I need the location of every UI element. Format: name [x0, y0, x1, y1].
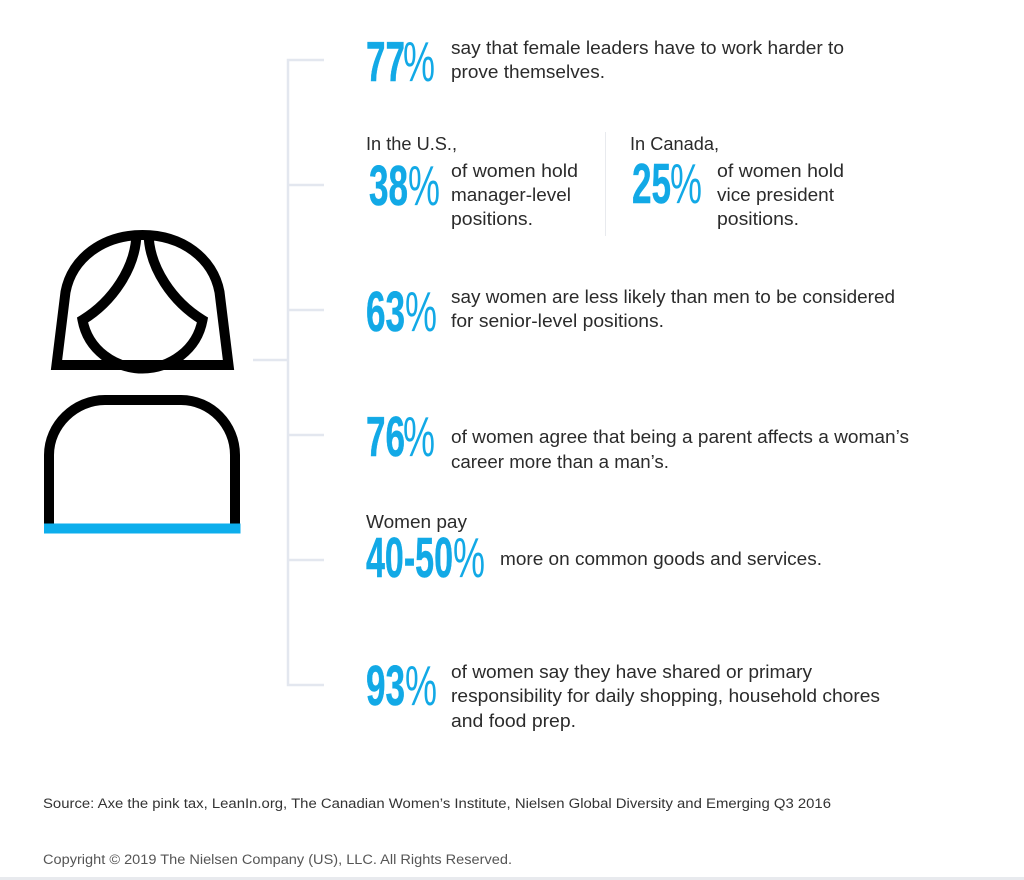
stat: 76% [366, 405, 909, 472]
stat: 93% [366, 654, 880, 731]
stat: 76%: 76 [366, 405, 405, 469]
stat: 93%: 93 [366, 654, 405, 718]
stat: U.S. 38%: positions. [451, 208, 533, 229]
stat: U.S. 38% [366, 133, 578, 229]
stat: Canada 25%: 25 [632, 152, 671, 216]
copyright: Copyright © 2019 The Nielsen Company (US), LLC. All Rights Reserved. [43, 852, 512, 867]
stat: Canada 25%: % [670, 152, 702, 216]
stat: 93%: of women say they have shared or primary [451, 661, 813, 682]
stat: 77% [366, 30, 844, 94]
stat: U.S. 38%: % [408, 154, 440, 218]
stat: 93%: responsibility for daily shopping, household chores [451, 685, 880, 706]
source note: Source: Axe the pink tax, LeanIn.org, The Canadian Women’s Institute, Nielsen Global Diversity and Emerging Q3 2016 [43, 796, 831, 811]
stat: 76%: % [403, 405, 435, 469]
stat: 77%: prove themselves. [451, 61, 605, 82]
stat: 76%: career more than a man’s. [451, 451, 669, 472]
stat: Canada 25%: vice president [717, 184, 834, 205]
stat: 77%: 77 [366, 30, 405, 94]
icon: hair outline [56, 235, 228, 365]
stat: U.S. 38%: of women hold [451, 160, 578, 181]
stat: Canada 25%: of women hold [717, 160, 844, 181]
stat: 63%: 63 [366, 280, 405, 344]
bottom strip [0, 877, 1024, 880]
stat: 40-50%: 40-50 [366, 526, 453, 590]
stat: 76%: of women agree that being a parent affects a woman’s [451, 426, 909, 447]
stat: 40-50%: % [453, 526, 485, 590]
stat: Canada 25% [630, 133, 844, 229]
stat: 63%: say women are less likely than men to be considered [451, 286, 895, 307]
stat: U.S. 38%: manager-level [451, 184, 571, 205]
icon: face and parting [82, 233, 202, 368]
icon: shoulders [49, 400, 235, 524]
stat: 93%: and food prep. [451, 710, 576, 731]
stat: 63% [366, 280, 895, 344]
connector bracket [253, 60, 324, 685]
stat: 93%: % [405, 654, 437, 718]
stat: 77%: say that female leaders have to work harder to [451, 37, 844, 58]
stat: Canada 25%: positions. [717, 208, 799, 229]
icon: woman [44, 233, 240, 534]
stat: 40-50%: Women pay [366, 511, 468, 532]
stat: 40-50%: more on common goods and services. [500, 548, 822, 569]
stat: U.S. 38%: 38 [369, 154, 408, 218]
stat: 40-50% [366, 511, 822, 590]
divider [605, 132, 606, 236]
icon: blue base bar [44, 524, 240, 534]
stat: U.S. 38%: In the U.S., [366, 133, 457, 154]
stat: 63%: for senior-level positions. [451, 310, 664, 331]
stat: 63%: % [405, 280, 437, 344]
stat: Canada 25%: In Canada, [630, 133, 719, 154]
stat: 77%: % [403, 30, 435, 94]
